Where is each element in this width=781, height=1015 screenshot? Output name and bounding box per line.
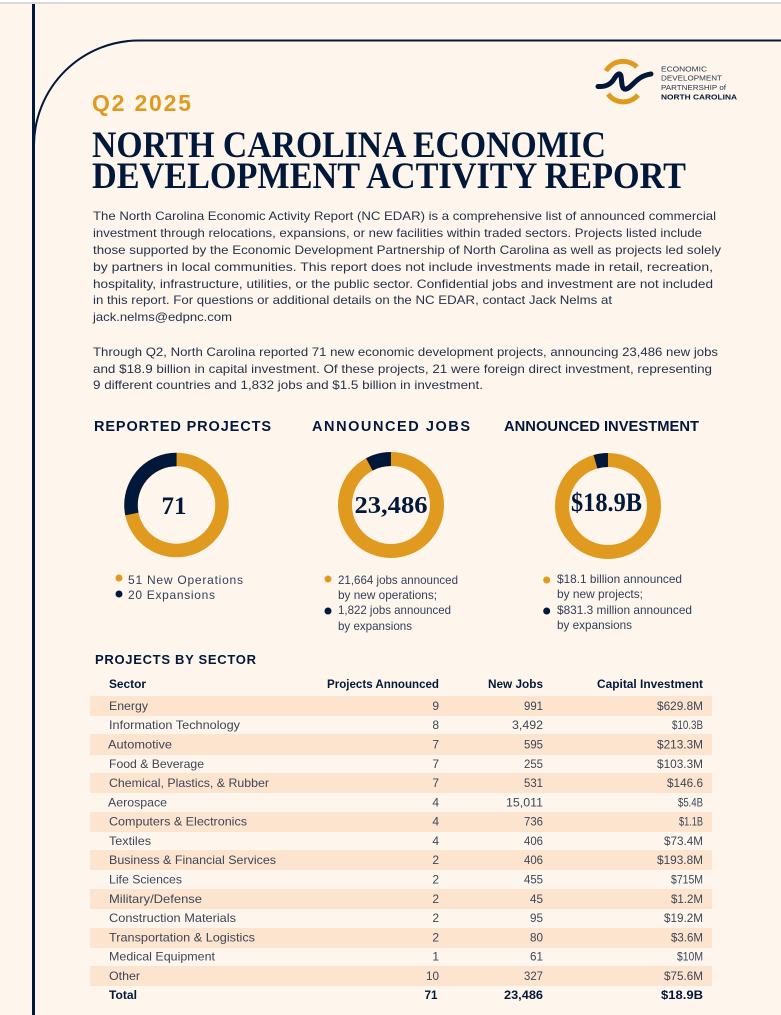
row: Aerospace: 15,011 [506, 796, 543, 810]
row: Aerospace: $5.4B [678, 796, 703, 810]
row: Food & Beverage: Food & Beverage [109, 757, 204, 771]
quarter label: Q2 2025 [92, 90, 191, 116]
table: projects by sector [90, 677, 712, 1002]
row: Medical Equipment: Medical Equipment [109, 950, 216, 964]
row: Information Technology: 8 [432, 718, 439, 732]
donut chart [329, 443, 453, 567]
row: Medical Equipment: 1 [432, 950, 439, 964]
legend: by expansions [338, 619, 412, 633]
intro paragraph: jack.nelms@edpnc.com [92, 310, 232, 324]
row: Chemical, Plastics, & Rubber [109, 776, 703, 790]
panel: announced investment [504, 419, 699, 632]
row: Life Sciences: $715M [671, 872, 703, 886]
row: Computers & Electronics: $1.1B [679, 814, 703, 828]
row: Transportation & Logistics: 80 [530, 930, 543, 944]
legend [324, 573, 458, 633]
intro paragraph: The North Carolina Economic Activity Report (NC EDAR) is a comprehensive list of announced commercial [93, 209, 716, 223]
row: Textiles: 4 [432, 834, 439, 848]
intro paragraph [92, 209, 721, 324]
value: $18.9B [571, 488, 642, 517]
table header: Sector [109, 677, 146, 691]
row: Construction Materials: $19.2M [664, 911, 703, 925]
row: Transportation & Logistics [109, 930, 703, 944]
title: NORTH CAROLINA ECONOMIC [92, 125, 606, 166]
row: Medical Equipment: 61 [530, 950, 543, 964]
legend: 51 New Operations [128, 573, 243, 587]
value: 23,486 [354, 493, 428, 519]
row: Energy: 9 [432, 699, 439, 713]
row: Automotive [108, 738, 703, 752]
title [92, 125, 686, 197]
row: Information Technology: 3,492 [512, 718, 543, 732]
row: Total: Total [109, 988, 137, 1002]
row: Military/Defense: 2 [432, 892, 439, 906]
row: Other: $75.6M [664, 969, 703, 983]
logo [598, 61, 737, 102]
donut chart [551, 449, 665, 563]
intro paragraph: hospitality, infrastructure, utilities, or the public sector. Confidential jobs and investment are not included [93, 277, 713, 291]
title: DEVELOPMENT ACTIVITY REPORT [92, 156, 686, 197]
row: Other [109, 969, 703, 983]
row: Other: 10 [426, 969, 439, 983]
intro paragraph: investment through relocations, expansions, or new facilities within traded sectors. Projects listed include [93, 226, 702, 240]
row: Life Sciences [109, 872, 703, 886]
logo text: DEVELOPMENT [661, 76, 723, 82]
row: Military/Defense: $1.2M [671, 892, 703, 906]
summary paragraph: and $18.9 billion in capital investment. Of these projects, 21 were foreign direct investment, representing [93, 362, 712, 376]
row: Automotive: Automotive [108, 738, 172, 752]
icon: logo mark [598, 61, 651, 102]
row: Medical Equipment [109, 950, 703, 964]
table header [109, 677, 703, 691]
row: Energy: $629.8M [657, 699, 703, 713]
row: Information Technology [109, 718, 703, 732]
panel: reported projects [94, 419, 271, 602]
logo text: ECONOMIC [661, 66, 707, 74]
row: Automotive: 595 [524, 738, 543, 752]
summary paragraph [93, 345, 718, 392]
row: Automotive: 7 [432, 738, 439, 752]
logo text: NORTH CAROLINA [661, 94, 737, 102]
row: Food & Beverage: $103.3M [657, 757, 703, 771]
row: Information Technology: Information Technology [109, 718, 240, 732]
row: Food & Beverage: 255 [524, 757, 543, 771]
row: Textiles: $73.4M [664, 834, 703, 848]
row: Information Technology: $10.3B [672, 718, 703, 732]
row: Construction Materials [109, 911, 703, 925]
heading: REPORTED PROJECTS [94, 419, 271, 435]
row: Life Sciences: 2 [432, 872, 439, 886]
row: Military/Defense: Military/Defense [109, 892, 202, 906]
intro paragraph: in this report. For questions or additional details on the NC EDAR, contact Jack Nelms at [93, 293, 613, 307]
row: Energy: 991 [524, 699, 543, 713]
row: Total [109, 988, 703, 1002]
row: Chemical, Plastics, & Rubber: Chemical, Plastics, & Rubber [109, 776, 269, 790]
row: Food & Beverage: 7 [432, 757, 439, 771]
row: Transportation & Logistics: $3.6M [671, 930, 703, 944]
row: Construction Materials: Construction Materials [109, 911, 236, 925]
row: Other: Other [109, 969, 140, 983]
row: Chemical, Plastics, & Rubber: 7 [432, 776, 439, 790]
legend: $18.1 billion announced [557, 572, 682, 586]
legend: by new projects; [557, 587, 643, 601]
row: Aerospace: 4 [432, 796, 439, 810]
value: 71 [162, 493, 186, 520]
row: Life Sciences: Life Sciences [109, 872, 182, 886]
donut chart [123, 451, 230, 559]
row: Business & Financial Services: 2 [432, 853, 439, 867]
logo text [661, 66, 737, 102]
row: Textiles: Textiles [109, 834, 151, 848]
table header: New Jobs [488, 677, 543, 691]
row: Energy [109, 699, 703, 713]
row: Total: $18.9B [661, 988, 703, 1002]
legend [543, 572, 692, 632]
intro paragraph: by partners in local communities. This report does not include investments made in retail, recreation, [93, 260, 713, 274]
summary paragraph: Through Q2, North Carolina reported 71 new economic development projects, announcing 23,486 new jobs [93, 345, 718, 359]
row: Transportation & Logistics: 2 [432, 930, 439, 944]
row: Textiles: 406 [524, 834, 543, 848]
row: Aerospace [108, 796, 703, 810]
panel: announced jobs [312, 419, 470, 633]
heading: ANNOUNCED INVESTMENT [504, 419, 699, 435]
legend [116, 573, 243, 602]
row: Transportation & Logistics: Transportation & Logistics [109, 930, 255, 944]
row: Computers & Electronics [109, 814, 703, 828]
row: Textiles [109, 834, 703, 848]
row: Business & Financial Services [109, 853, 703, 867]
row: Military/Defense: 45 [530, 892, 543, 906]
row: Construction Materials: 95 [530, 911, 543, 925]
row: Business & Financial Services: 406 [524, 853, 543, 867]
row: Computers & Electronics: Computers & Electronics [109, 814, 247, 828]
table header: Capital Investment [597, 677, 703, 691]
row: Military/Defense [109, 892, 703, 906]
row: Food & Beverage [109, 757, 703, 771]
legend: by new operations; [338, 588, 437, 602]
row: Total: 23,486 [504, 988, 543, 1002]
row: Medical Equipment: $10M [677, 950, 703, 964]
legend: 1,822 jobs announced [338, 603, 451, 617]
table heading: PROJECTS BY SECTOR [95, 652, 257, 667]
row: Automotive: $213.3M [657, 738, 703, 752]
legend: by expansions [557, 618, 632, 632]
row: Chemical, Plastics, & Rubber: 531 [524, 776, 543, 790]
row: Computers & Electronics: 736 [524, 814, 543, 828]
row: Aerospace: Aerospace [108, 796, 167, 810]
row: Construction Materials: 2 [432, 911, 439, 925]
row: Total: 71 [424, 988, 438, 1002]
row: Business & Financial Services: $193.8M [657, 853, 703, 867]
table header: Projects Announced [327, 677, 439, 691]
logo text: PARTNERSHIP of [661, 85, 726, 92]
row: Energy: Energy [109, 699, 148, 713]
row: Other: 327 [524, 969, 543, 983]
intro paragraph: those supported by the Economic Development Partnership of North Carolina as well as projects led solely [93, 243, 721, 257]
legend: $831.3 million announced [557, 603, 692, 617]
heading: ANNOUNCED JOBS [312, 419, 470, 435]
legend: 20 Expansions [128, 588, 215, 602]
row: Chemical, Plastics, & Rubber: $146.6 [667, 776, 703, 790]
row: Business & Financial Services: Business & Financial Services [109, 853, 276, 867]
row: Computers & Electronics: 4 [432, 814, 439, 828]
row: Life Sciences: 455 [524, 872, 543, 886]
summary paragraph: 9 different countries and 1,832 jobs and $1.5 billion in investment. [93, 378, 483, 392]
legend: 21,664 jobs announced [338, 573, 458, 587]
